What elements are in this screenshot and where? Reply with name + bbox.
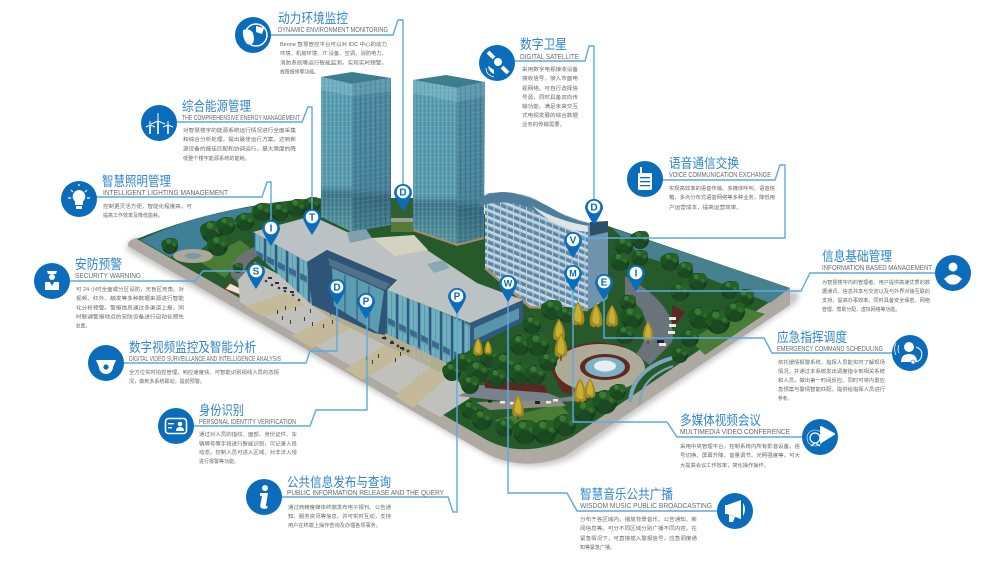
- pin: T: [303, 209, 321, 235]
- callout: security warning: 可 24 小时全面或分区设防，无盲区死角。对: [76, 285, 184, 293]
- callout: voice communication exchange: VOICE COMMUNICATION EXCHANGE: [669, 170, 771, 179]
- icon: video conference: [802, 419, 838, 455]
- pin: P front: P: [363, 296, 370, 308]
- icon: security guard: [34, 263, 70, 299]
- callout: public information release: PUBLIC INFORMATION RELEASE AND THE QUERY: [287, 488, 444, 497]
- callout: dynamic environment monitoring: 故障报修等功能。: [280, 68, 319, 76]
- callout: emergency command scheduling: 急预案与警情智能匹配，提供给指挥人员进行: [778, 385, 885, 393]
- callout: multimedia video conference: 大提高会议工作效率，简化操作操作。: [680, 461, 769, 469]
- pin: I right: I: [635, 268, 638, 280]
- pin: I right: [627, 265, 645, 291]
- callout: information based management: 管理、帮助分配、虚拟网络等功能。: [822, 305, 900, 313]
- icon: command headset: [892, 335, 928, 371]
- callout: dynamic environment monitoring: 消防系统等运行智能监测，实现实时预警，: [280, 58, 387, 66]
- callout: information based management: 支持，提高办事效率。同时具备安全保密、网络: [822, 296, 930, 304]
- callout: public information release: [246, 296, 457, 529]
- callout: digital satellite: 数字卫星: [520, 37, 567, 52]
- callout: digital satellite: 接收信号，接入市面电: [522, 74, 578, 82]
- callout: multimedia video conference: 采用中央管理平台，控制系统内所有影音设备。信: [680, 442, 800, 450]
- lawn patches: [200, 240, 765, 440]
- icon: leaf globe: [235, 17, 271, 53]
- callout: emergency command scheduling: 应急指挥调度: [777, 329, 847, 345]
- pin: V: [564, 232, 582, 258]
- callout: digital satellite: 式电视发展的综合数据: [522, 111, 578, 119]
- callout: digital video surveillance: 况，做到多系统联动，提前预警。: [129, 377, 205, 385]
- callout: digital satellite: 输功能，满足未来交互: [522, 102, 578, 110]
- callout: digital satellite: 视网络。可自行选择信: [522, 84, 578, 92]
- callout: information based management: INFORMATION BASED MANAGEMENT: [822, 263, 932, 272]
- icon: dome camera: [88, 345, 124, 381]
- callout: security warning: [34, 257, 256, 330]
- pin: E: [595, 274, 613, 300]
- left park road: [173, 244, 270, 298]
- garden trees behind buildings: [161, 197, 410, 273]
- garden trees: [442, 231, 754, 444]
- icon: light bulb: [61, 181, 97, 217]
- callout: emergency command scheduling: [604, 282, 928, 402]
- callout: comprehensive energy management: [141, 99, 312, 217]
- icon: person with gear: [935, 255, 971, 291]
- pin: D front: D: [333, 282, 341, 294]
- callout: comprehensive energy management: 综合能源管理: [182, 99, 251, 114]
- callout: emergency command scheduling: 和人员，做出第一时间反应。同时可将内置应: [778, 376, 885, 384]
- callout: dynamic environment monitoring: DYNAMIC ENVIRONMENT MONITORING: [278, 25, 388, 34]
- callout: personal identity verification: [158, 301, 367, 465]
- callout: wisdom music public broadcasting: 知等紧急广播。: [580, 543, 615, 551]
- callout: wisdom music public broadcasting: 紧急情况下，可直接插入警报信号，应急调度通: [580, 534, 698, 542]
- callout: intelligent lighting management: 智慧照明管理: [102, 174, 171, 189]
- callout: dynamic environment monitoring: 环境、机房环境、IT 设备、空调、消防电力、: [280, 49, 387, 57]
- callout: security warning: 视频、红外、触发等多种数据来源进行智能: [76, 294, 184, 302]
- people and cars: [265, 280, 410, 364]
- callout: public information release: 用户在终端上操作查询及办理各项事务。: [288, 521, 381, 529]
- callout: wisdom music public broadcasting: 智慧音乐公共广播: [580, 486, 673, 502]
- callout: personal identity verification: 动态，控制人员可进入区域，对非法入侵: [199, 448, 297, 456]
- front plaza paving: [238, 262, 470, 417]
- callout: information based management: [636, 248, 971, 313]
- pin: I left: I: [270, 224, 273, 234]
- callout: personal identity verification: 通过对人员的指纹、面部、身份证件、车: [199, 430, 297, 438]
- icon: walkie talkie: [627, 161, 663, 197]
- callout: public information release: 公共信息发布与查询: [287, 474, 391, 490]
- icon: wind turbines: [141, 105, 177, 141]
- callout: intelligent lighting management: INTELLIGENT LIGHTING MANAGEMENT: [103, 188, 228, 197]
- callout: information based management: 据通讯、信息共享与交流以及与外界对接互联的: [822, 287, 930, 295]
- pin: P front: [357, 293, 375, 319]
- pin: P right: [448, 288, 466, 314]
- callout: personal identity verification: 进行报警等功能。: [199, 457, 239, 465]
- callout: comprehensive energy management: 对智慧楼宇的能源系统运行情况进行全面采集: [183, 126, 297, 134]
- pin: D tower: D: [399, 188, 407, 198]
- callout: personal identity verification: PERSONAL IDENTITY VERIFICATION: [199, 417, 296, 426]
- icon: megaphone: [717, 493, 753, 529]
- pin: I left: [262, 220, 280, 246]
- pin: P right: P: [454, 292, 461, 302]
- callout: multimedia video conference: 多媒体视频会议: [680, 412, 761, 428]
- entrance arch: [630, 358, 673, 404]
- callout: digital video surveillance: 全方位实时拍控管理，响应速度快。可智能识别视线人员的态情: [129, 368, 279, 376]
- callout: public information release: 通过商精度媒体终端发布电子报刊、公告通: [288, 503, 392, 511]
- callout: information based management: 为智慧楼宇内的管理者、用户提供高速优质的数: [822, 278, 931, 286]
- icon: satellite: [479, 45, 515, 81]
- callout: security warning: 安防预警: [75, 257, 122, 272]
- flag poles: [414, 345, 429, 394]
- callout: digital video surveillance: [88, 287, 337, 385]
- platform base: [127, 198, 800, 467]
- callout: emergency command scheduling: 情况，并通过本系统发出调度指令到相关系统: [778, 367, 885, 375]
- lakes: [140, 206, 790, 303]
- callout: digital satellite: DIGITAL SATELLITE: [520, 52, 579, 61]
- callout: emergency command scheduling: 依托援情报警系统，指挥人员能实时了解现场: [778, 358, 885, 366]
- callout: comprehensive energy management: THE COMPREHENSIVE ENERGY MANAGEMENT: [182, 113, 300, 122]
- callout: voice communication exchange: 语音通信交换: [669, 155, 739, 171]
- callout: comprehensive energy management: 和综合分析处理，提出最佳运行方案，达到新: [183, 135, 296, 143]
- callout: digital satellite: 号源，同时具备双向传: [522, 93, 578, 101]
- garden road and parking: [458, 276, 685, 410]
- callout: emergency command scheduling: EMERGENCY COMMAND SCHEDULING: [777, 344, 883, 353]
- pin: M: [564, 265, 582, 291]
- pin: D front: [328, 279, 346, 305]
- pin: V: V: [570, 236, 577, 246]
- 3D building scene: [127, 72, 800, 467]
- callout: wisdom music public broadcasting: 分布于各区域内，播放背景音乐、公告通知、新: [580, 515, 697, 523]
- callout: multimedia video conference: 号切换、屏幕升降、音量调节、光照强度等，可大: [680, 451, 800, 459]
- callout: security warning: 化分析预警。警报信息通过多渠道上报，同: [76, 304, 184, 312]
- callout: public information release: 知、服务资讯等信息，并可实时互动，支持: [288, 512, 391, 520]
- tower two: [413, 75, 485, 245]
- callout: multimedia video conference: MULTIMEDIA VIDEO CONFERENCE: [680, 427, 790, 436]
- tower one: [321, 72, 391, 232]
- callout: voice communication exchange: 户运营成本，提高运营效率。: [669, 203, 742, 211]
- pin: M: M: [569, 268, 577, 278]
- hotel wing: [477, 192, 608, 310]
- tree patch between towers: [391, 198, 413, 232]
- pin: E: E: [601, 278, 608, 288]
- pin: T: T: [309, 212, 315, 224]
- callout: digital satellite: [479, 37, 594, 207]
- pin: D hotel: D: [590, 202, 598, 214]
- callout: digital satellite: 业务的传输需要。: [522, 120, 565, 128]
- callout: security warning: 处置。: [76, 322, 90, 330]
- callout: dynamic environment monitoring: Beone 智慧管控平台可以对 IDC 中心的动力: [280, 40, 387, 48]
- low office building: [253, 216, 523, 363]
- callout: personal identity verification: 身份识别: [199, 403, 244, 418]
- pin: D tower: [394, 184, 412, 211]
- callout: wisdom music public broadcasting: WISDOM MUSIC PUBLIC BROADCASTING: [580, 501, 712, 510]
- callout: digital video surveillance: DIGITAL VIDEO SURVEILLANCE AND INTELLIGENCE ANALYSIS: [129, 354, 281, 363]
- callout: information based management: 信息基础管理: [822, 248, 892, 264]
- icon: ID card: [158, 408, 194, 444]
- central fountain plaza: [552, 342, 645, 396]
- callout: wisdom music public broadcasting: [508, 283, 753, 551]
- callout: intelligent lighting management: 提高工作效率及降低能耗。: [103, 211, 163, 219]
- callout: comprehensive energy management: 低整个楼宇能源系统的能耗。: [183, 154, 250, 162]
- callout: comprehensive energy management: 源设备的最佳匹配和协调运行，最大限度的降: [183, 144, 296, 152]
- pin: W: [499, 275, 517, 302]
- callout: dynamic environment monitoring: 动力环境监控: [278, 11, 348, 26]
- callout: dynamic environment monitoring: [235, 11, 403, 192]
- pin: W: W: [504, 278, 513, 288]
- callout: wisdom music public broadcasting: 闻信息等。可分不同区域分别广播不同内容。在: [580, 524, 697, 532]
- callout: intelligent lighting management: [61, 174, 271, 228]
- icon: information i: [246, 479, 282, 515]
- callout: digital satellite: 采用数字电视接收设备: [522, 65, 579, 73]
- callout: multimedia video conference: [573, 273, 838, 469]
- callout: intelligent lighting management: 控制更灵活方便，智能化程度高，可: [103, 202, 192, 210]
- callout: security warning: 时联通警报地点的安防设备进行自动化预先: [76, 312, 184, 320]
- callout: security warning: SECURITY WARNING: [75, 271, 141, 280]
- callout: voice communication exchange: 实现高效率的语音传输、多媒体呼叫、语音信: [669, 184, 775, 192]
- callout: personal identity verification: 辆牌号等手段进行智能识别，可记录人员: [199, 440, 297, 448]
- callout: voice communication exchange: 箱、多点分布式语音网络等多种业务，降低用: [669, 193, 775, 201]
- pin: S: [247, 263, 265, 289]
- callout: digital video surveillance: 数字视频监控及智能分析: [129, 340, 256, 355]
- pin: D hotel: [585, 199, 603, 225]
- callout: voice communication exchange: [573, 155, 785, 238]
- pin: S: S: [253, 266, 260, 278]
- callout: emergency command scheduling: 参考。: [778, 394, 792, 402]
